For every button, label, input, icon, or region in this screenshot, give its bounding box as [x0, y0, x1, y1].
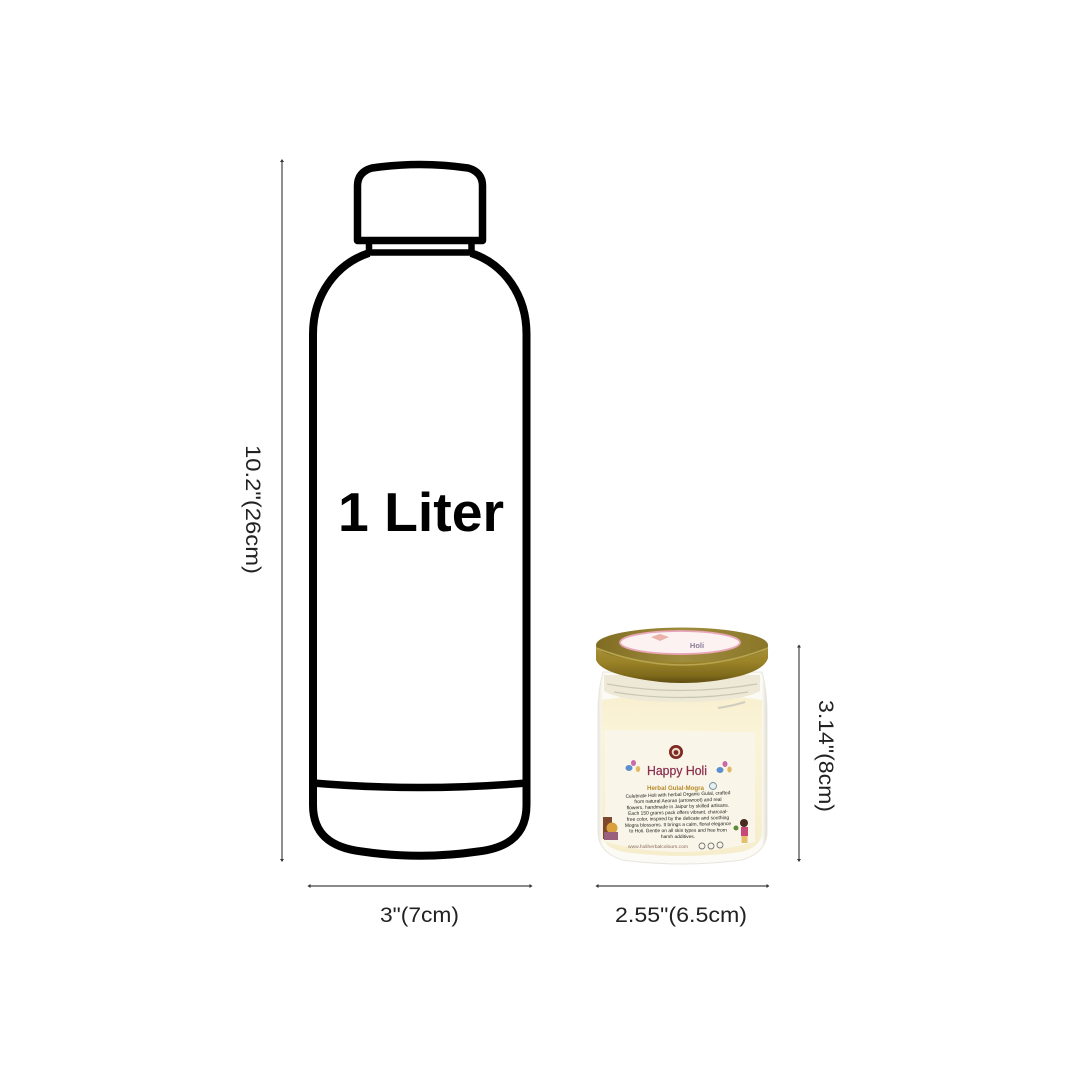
lid label — [620, 631, 740, 654]
arrow: bottle width — [308, 884, 532, 888]
subheading: Herbal Gulal-Mogra: Herbal Gulal-Mogra — [647, 785, 704, 792]
heading: Happy Holi: Happy Holi — [647, 763, 707, 778]
bottle cap — [358, 164, 482, 240]
jar glass body — [598, 672, 767, 864]
product: herbal gulal glass jar: Holi — [690, 641, 704, 650]
label description — [625, 790, 731, 840]
icon: 1 liter bottle outline — [313, 164, 526, 856]
label description: to Holi. Gentle on all skin types and free from — [629, 828, 727, 834]
bottle body — [313, 253, 526, 856]
product: herbal gulal glass jar — [596, 628, 768, 864]
label description: harsh additives. — [661, 834, 695, 840]
icon: right colour handprints — [716, 761, 732, 773]
dimension label: jar width: 2.55"(6.5cm) — [615, 904, 747, 927]
arrow: jar width — [596, 884, 770, 888]
label description: flowers, handmade in Jaipur by skilled artisans. — [627, 803, 729, 811]
label footer icons — [699, 842, 723, 849]
bottle neck — [367, 240, 473, 253]
dimension label: bottle width: 3"(7cm) — [380, 904, 459, 927]
icon: mogra flower — [710, 782, 716, 790]
label description: from natural Aeoran (arrowroot) and real — [634, 797, 722, 805]
jar neck glass — [604, 675, 760, 702]
label description: free color, inspired by the delicate and soothing — [627, 815, 729, 823]
label footer website: www.holiherbalcolours.com — [628, 844, 689, 849]
bottle base band — [313, 783, 526, 788]
arrow: bottle height — [280, 159, 284, 862]
arrow: jar height — [797, 644, 801, 862]
label description: Mogra blossoms. It brings a calm, floral elegance — [625, 821, 731, 829]
bottle label: 1 Liter: 1 Liter — [338, 481, 504, 543]
brand logo — [669, 745, 683, 759]
jar powder fill — [602, 694, 762, 856]
gold lid — [596, 645, 768, 683]
icon: left colour handprints — [626, 760, 640, 772]
label description: Celebrate Holi with herbal Organic Gulal, crafted — [625, 790, 731, 800]
jar front label — [603, 730, 755, 852]
dimension label: bottle height: 10.2"(26cm) — [241, 445, 264, 574]
label description: Each 150 grams pack offers vibrant, charcoal- — [628, 809, 728, 817]
illustration: left gift pot — [603, 817, 618, 840]
dimension label: jar height: 3.14"(8cm) — [814, 700, 837, 812]
illustration: right child figure — [734, 819, 748, 843]
